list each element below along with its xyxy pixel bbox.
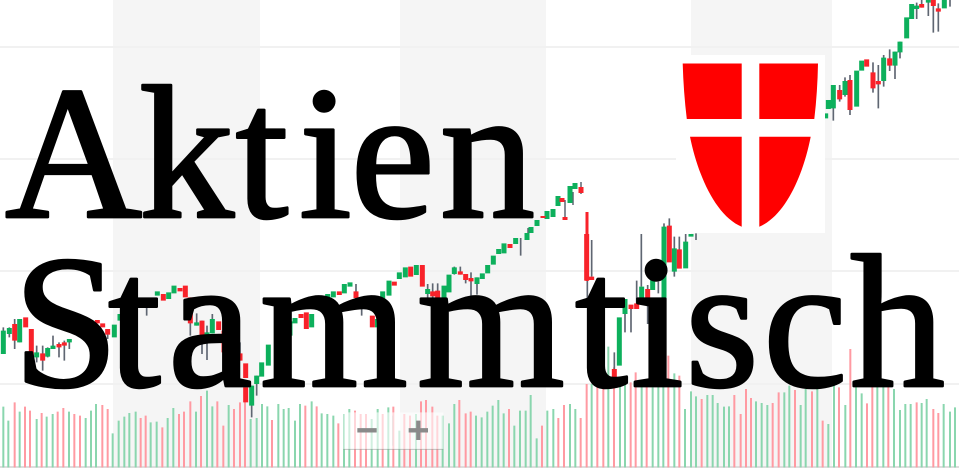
logo: Vienna coat of arms shield <box>676 55 825 233</box>
title: Aktien: Aktien <box>5 49 535 259</box>
icon: minus <box>357 424 377 437</box>
chart zoom control <box>343 412 443 449</box>
title: Stammtisch: Stammtisch <box>13 218 945 428</box>
chart: volume bars <box>3 331 955 467</box>
icon: plus <box>409 421 428 440</box>
